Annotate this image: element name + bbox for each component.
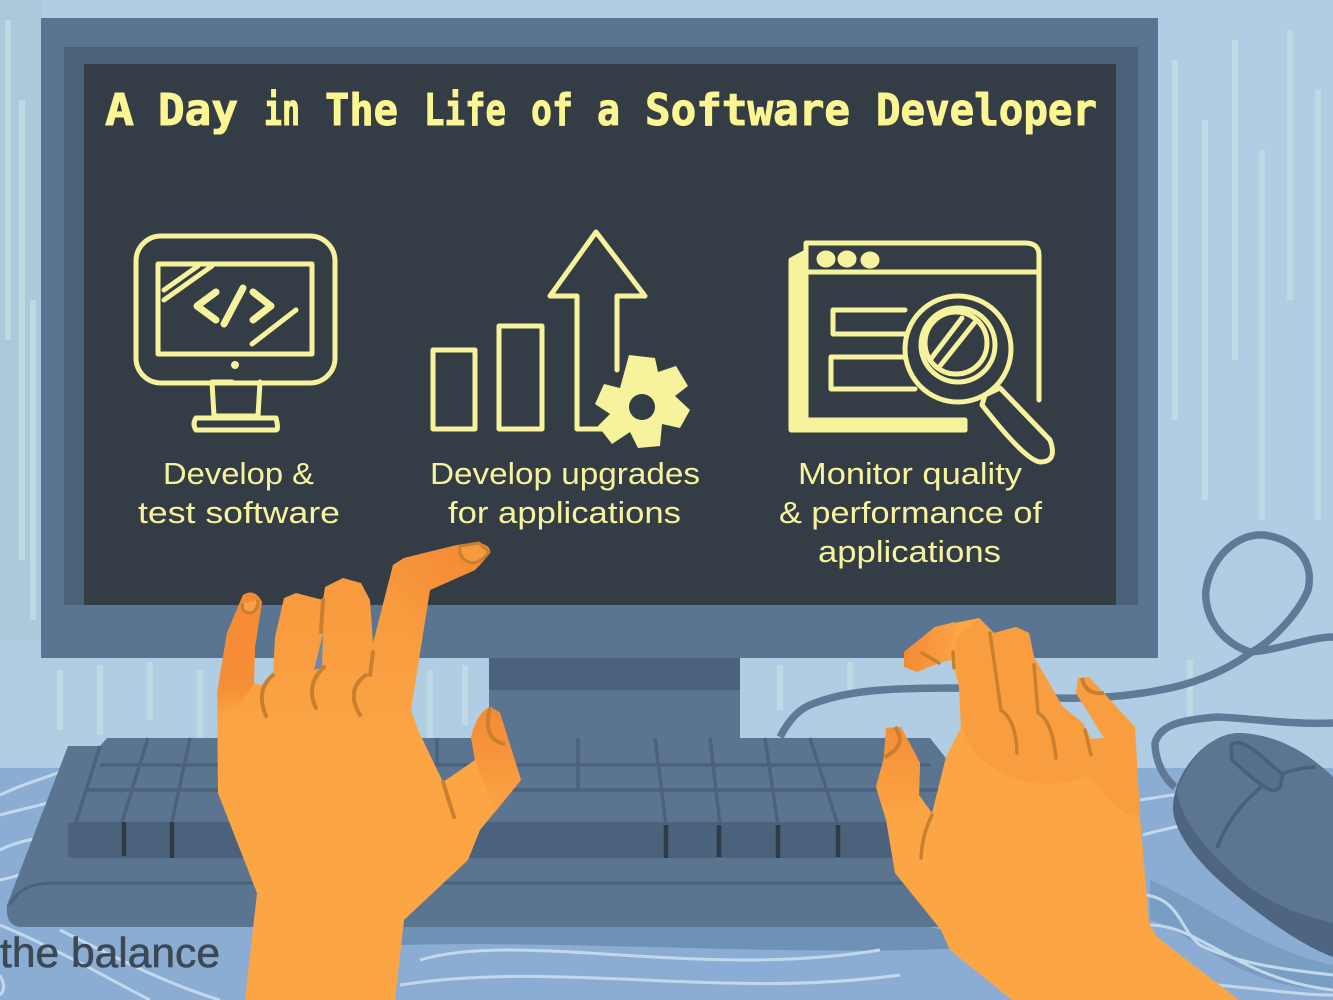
pinky shading bbox=[217, 593, 262, 715]
logo: the balance: the balance bbox=[0, 929, 220, 976]
mouse cable bbox=[780, 535, 1333, 787]
title: of bbox=[531, 85, 573, 136]
thumb shading bbox=[471, 707, 521, 812]
label: develop and test: test software bbox=[138, 496, 340, 530]
keyboard bbox=[7, 738, 1010, 927]
label: develop upgrades: Develop upgrades bbox=[430, 457, 700, 491]
thumb shading bbox=[876, 727, 920, 830]
title: Life bbox=[424, 85, 506, 136]
title bbox=[105, 85, 1097, 136]
title: Day bbox=[158, 85, 238, 136]
label: develop and test: Develop & bbox=[163, 457, 314, 491]
index fingertip shading bbox=[385, 543, 490, 640]
title: A bbox=[105, 85, 134, 136]
knuckle shading bbox=[955, 618, 1140, 817]
monitor casing bbox=[41, 18, 1158, 658]
title: in bbox=[264, 85, 300, 136]
icon: monitor with code bbox=[136, 236, 335, 430]
label: develop upgrades bbox=[430, 457, 700, 530]
title: Developer bbox=[876, 85, 1097, 136]
title: Software bbox=[645, 85, 850, 136]
label: monitor quality: Monitor quality bbox=[798, 457, 1023, 491]
mouse bbox=[1173, 733, 1333, 957]
label: monitor quality: & performance of bbox=[779, 496, 1043, 530]
index fingertip shading bbox=[904, 622, 955, 672]
label: monitor quality bbox=[779, 457, 1043, 569]
label: develop and test bbox=[138, 457, 340, 530]
left hand bbox=[217, 543, 521, 1000]
wall background bbox=[0, 0, 1333, 770]
icon: bars, arrow and gear bbox=[433, 232, 690, 448]
right hand bbox=[876, 618, 1239, 1000]
monitor stand bbox=[489, 655, 740, 745]
screen bbox=[84, 64, 1116, 605]
title: The bbox=[325, 85, 398, 136]
title: a bbox=[597, 85, 620, 136]
label: monitor quality: applications bbox=[818, 535, 1001, 569]
finger gap bbox=[314, 633, 323, 670]
desk with wood grain bbox=[0, 768, 1333, 1000]
label: develop upgrades: for applications bbox=[448, 496, 681, 530]
icon: browser window with magnifier bbox=[791, 243, 1052, 462]
